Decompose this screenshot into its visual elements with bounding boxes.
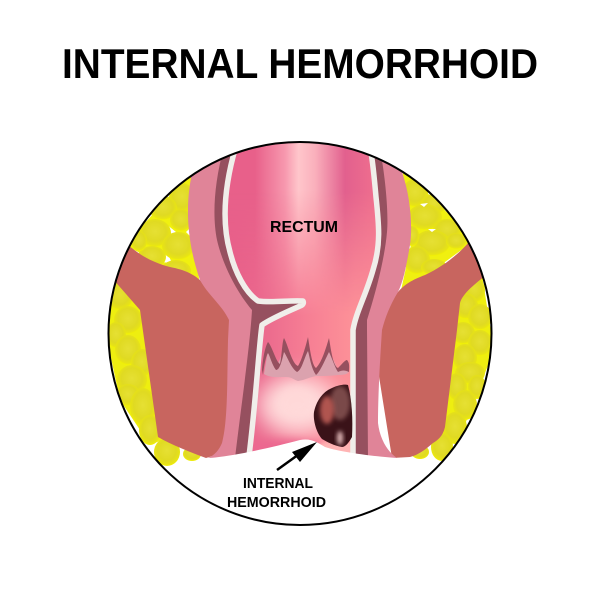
- mucosal fold: dark zigzag: [262, 337, 349, 375]
- fat tissue: upper right: [401, 173, 468, 288]
- fat tissue: lower left: [105, 278, 201, 466]
- bottom opening: [209, 440, 396, 459]
- muscular band: left: [214, 156, 302, 454]
- fat tissue: upper left: [130, 177, 200, 280]
- muscular band: right: [356, 158, 388, 456]
- fat tissue: lower right: [411, 275, 494, 461]
- label: internal hemorrhoid: HEMORRHOID: [227, 494, 326, 511]
- circle outline: [108, 142, 492, 525]
- mucosal fold: light underside: [264, 349, 349, 381]
- label: rectum: RECTUM: [270, 219, 338, 236]
- label: internal hemorrhoid: INTERNAL: [243, 475, 313, 492]
- muscle: right: [379, 243, 482, 458]
- white lining: [225, 130, 379, 456]
- label: internal hemorrhoid: [227, 475, 326, 511]
- outer wall: left: [188, 160, 252, 458]
- rectum lumen: [228, 143, 376, 453]
- muscle: left: [112, 242, 232, 458]
- title: INTERNAL HEMORRHOID: [62, 40, 538, 87]
- arrow: [277, 442, 317, 470]
- outer wall: right: [367, 162, 412, 458]
- hemorrhoid: [314, 384, 352, 447]
- circle diagram: [105, 130, 494, 525]
